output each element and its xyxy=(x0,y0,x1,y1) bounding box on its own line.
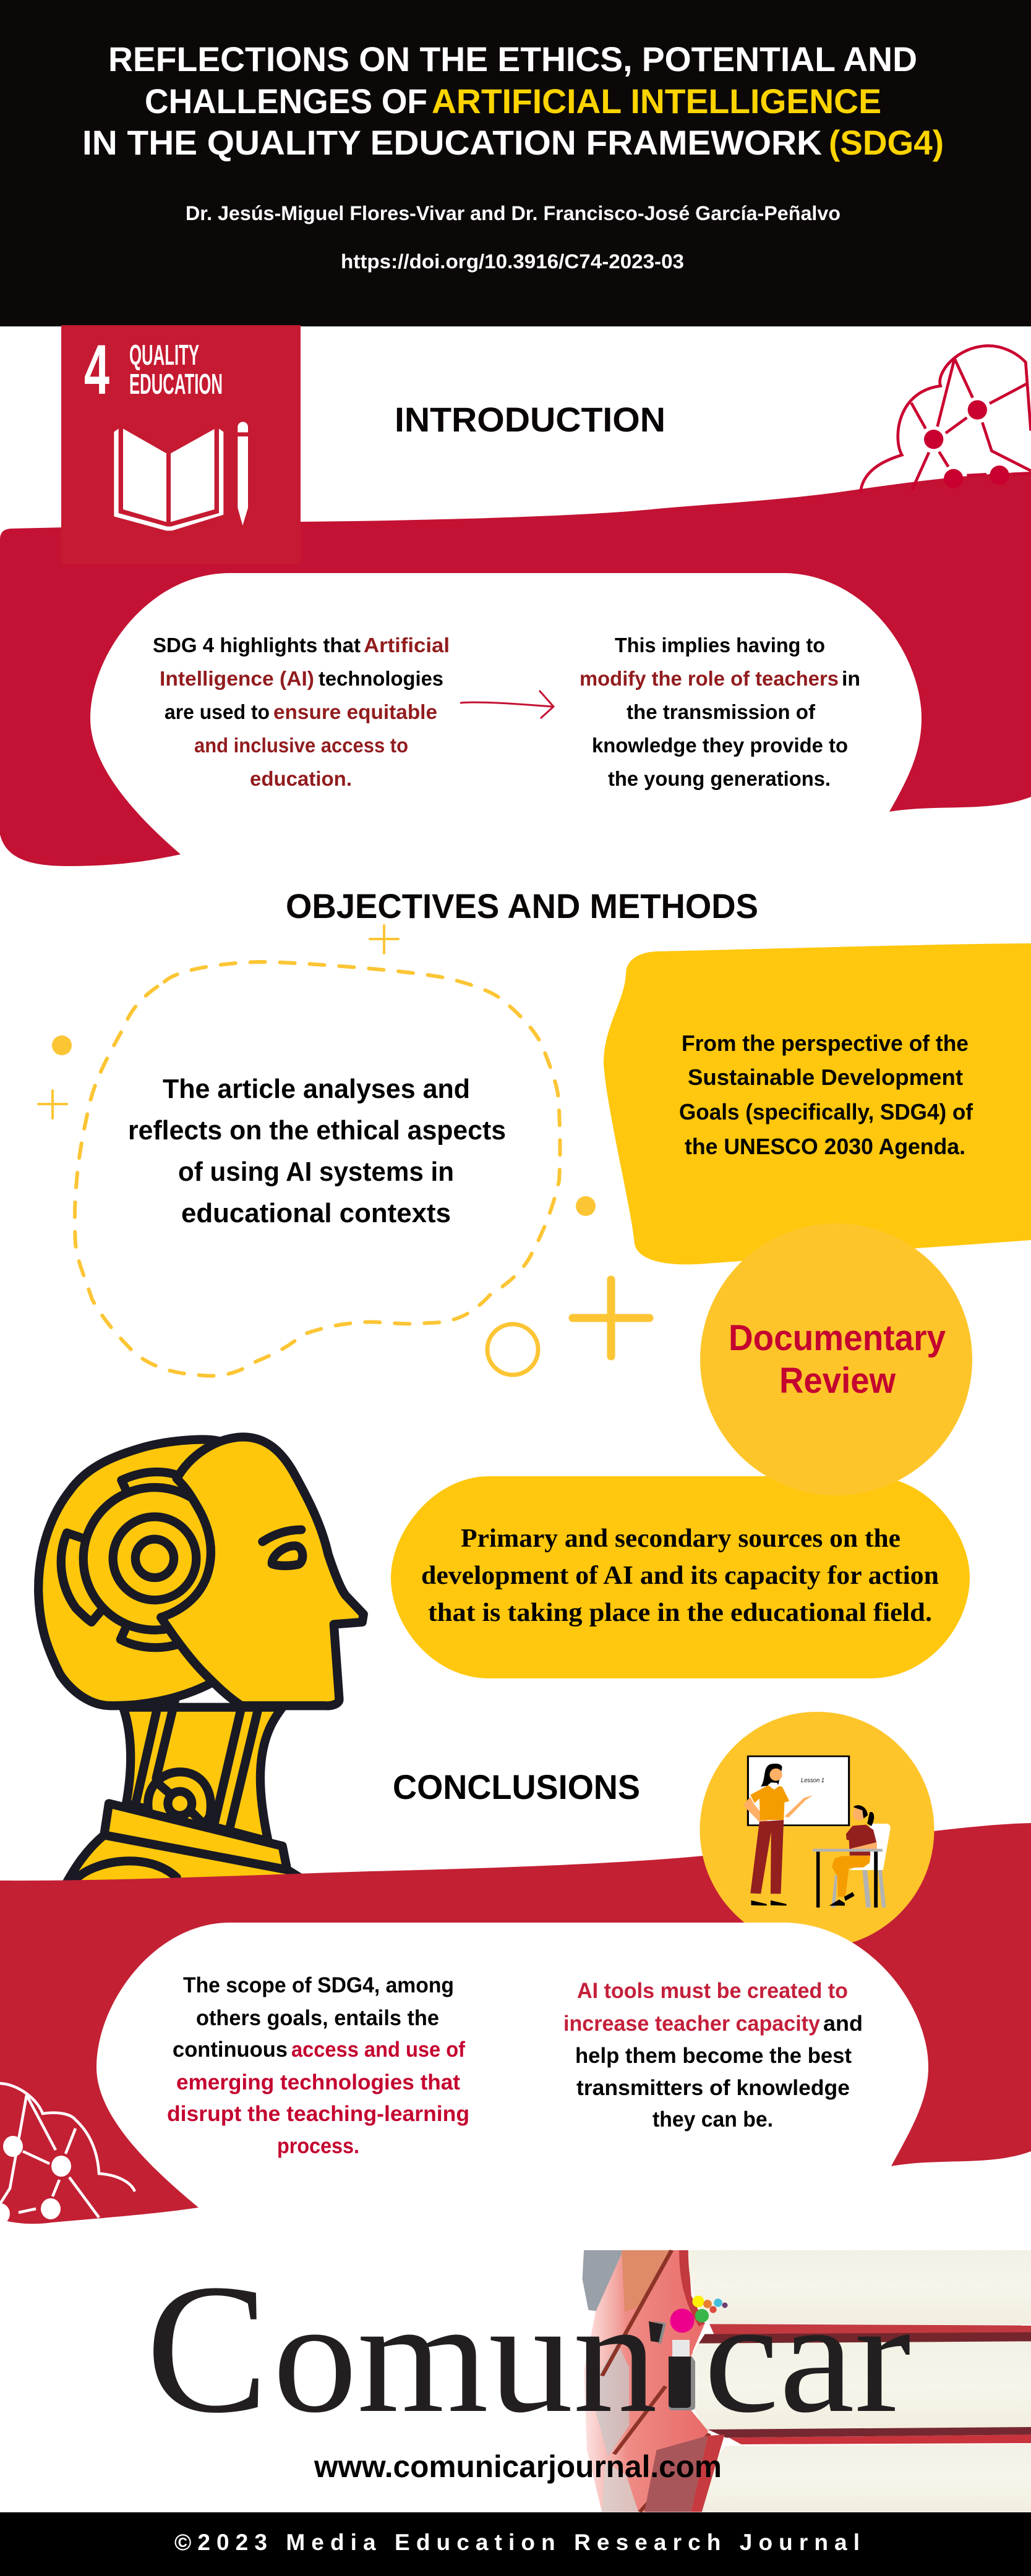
heading: conclusions: CONCLUSIONS xyxy=(393,1767,640,1806)
text: AI tools must be created: AI tools must be created to xyxy=(577,1979,848,2003)
text: scope of SDG4: access and use of xyxy=(291,2038,465,2062)
text: AI tools must be created xyxy=(563,1979,863,2132)
text: modify the role of teachers xyxy=(580,634,860,790)
icon: SDG 4 quality education tile xyxy=(61,325,301,564)
title: CHALLENGES OF xyxy=(145,82,427,121)
text: perspective xyxy=(679,1031,973,1159)
panel: footer: ©2023 Media Education Research Journal xyxy=(174,2530,860,2555)
text: scope of SDG4: process. xyxy=(277,2134,359,2158)
text: SDG 4 highlights: ensure equitable xyxy=(273,700,437,723)
logo: Comunicar: C xyxy=(146,2246,268,2451)
panel: introduction band xyxy=(0,472,1031,866)
icon: SDG 4 quality education tile: 4 xyxy=(84,331,109,409)
logo: Comunicar: car xyxy=(704,2267,911,2446)
panel: documentary review circle: Documentary xyxy=(729,1318,946,1358)
panel: primary and secondary sources pill xyxy=(391,1476,970,1678)
arrow xyxy=(460,691,554,718)
heading: objectives and methods: OBJECTIVES AND METHODS xyxy=(286,886,758,925)
panel: conclusions white card xyxy=(96,1923,928,2238)
text: SDG 4 highlights: are used to xyxy=(165,700,270,723)
icon: USB stick as letter i xyxy=(649,2321,695,2410)
text: AI tools must be created: increase teacher capacity xyxy=(563,2012,821,2036)
title xyxy=(82,40,944,162)
title: IN THE QUALITY EDUCATION FRAMEWORK xyxy=(82,123,822,162)
text: scope of SDG4: continuous xyxy=(173,2038,288,2062)
icon: network cloud bottom left xyxy=(0,2083,135,2224)
icon: robot head in profile xyxy=(38,1437,364,1902)
text: article aim: reflects on the ethical aspects xyxy=(128,1115,506,1146)
text: perspective: From the perspective of the xyxy=(682,1031,969,1056)
heading: introduction: INTRODUCTION xyxy=(395,400,665,439)
text: article aim: The article analyses and xyxy=(163,1074,470,1104)
text: AI tools must be created: help them become the best xyxy=(575,2044,852,2068)
text: scope of SDG4: The scope of SDG4, among xyxy=(183,1973,454,1997)
text: scope of SDG4: disrupt the teaching-learning xyxy=(167,2102,469,2126)
text: SDG 4 highlights: SDG 4 highlights that xyxy=(153,634,361,657)
icon: network cloud top right xyxy=(861,346,1031,493)
text: modify the role of teachers: the transmission of xyxy=(627,700,816,723)
panel: title header xyxy=(0,0,1031,326)
text: SDG 4 highlights: technologies xyxy=(319,667,443,690)
panel: footer xyxy=(0,2512,1031,2576)
text: AI tools must be created: they can be. xyxy=(652,2107,773,2132)
icon: coloured dots xyxy=(670,2296,727,2333)
icon: teacher xyxy=(743,1764,813,1906)
icon: student and desk xyxy=(813,1805,883,1908)
text: scope of SDG4: emerging technologies that xyxy=(176,2070,460,2094)
icon: book and pencil xyxy=(114,422,248,530)
icon: teacher and student circle xyxy=(700,1712,934,1948)
doi: https://doi.org/10.3916/C74-2023-03 xyxy=(341,250,684,273)
text: scope of SDG4: others goals, entails the xyxy=(196,2006,439,2030)
text: modify the role of teachers: knowledge they provide to xyxy=(592,734,848,757)
panel: conclusions band xyxy=(0,1823,1031,2224)
panel: documentary review circle xyxy=(700,1223,972,1495)
panel: documentary review circle: Review xyxy=(779,1361,896,1401)
icon: SDG 4 quality education tile: EDUCATION xyxy=(129,368,223,400)
decorative plus and dots xyxy=(38,925,649,1375)
panel: introduction white card xyxy=(90,573,922,878)
text: AI tools must be created: and xyxy=(823,2012,863,2036)
text: sources: that is taking place in the educational field. xyxy=(428,1599,932,1627)
logo: Comunicar: omun xyxy=(273,2267,657,2446)
title: ARTIFICIAL INTELLIGENCE xyxy=(432,82,881,121)
text: sources: Primary and secondary sources on the xyxy=(461,1524,901,1553)
text: SDG 4 highlights: and inclusive access to xyxy=(194,734,408,757)
text: modify the role of teachers: in xyxy=(842,667,860,690)
text: SDG 4 highlights: Artificial xyxy=(364,634,450,657)
panel: yellow perspective blob xyxy=(604,943,1031,1264)
authors: Dr. Jesús-Miguel Flores-Vivar and Dr. Francisco-José García-Peñalvo xyxy=(186,202,841,224)
text: modify the role of teachers: the young generations. xyxy=(608,767,831,790)
panel: dashed blob with article aim xyxy=(75,962,560,1376)
text: modify the role of teachers: modify the role of teachers xyxy=(580,667,839,690)
text: sources: development of AI and its capacity for action xyxy=(421,1562,939,1590)
text: article aim: educational contexts xyxy=(181,1198,451,1228)
image: stacked red books xyxy=(583,2250,1031,2512)
text: modify the role of teachers: This implies having to xyxy=(615,634,825,657)
text: scope of SDG4 xyxy=(167,1973,469,2158)
title: (SDG4) xyxy=(829,123,944,162)
text: sources xyxy=(421,1524,939,1627)
text: SDG 4 highlights: education. xyxy=(250,767,352,790)
logo: Comunicar xyxy=(146,2246,911,2451)
text: SDG 4 highlights: Intelligence (AI) xyxy=(160,667,314,690)
text: perspective: the UNESCO 2030 Agenda. xyxy=(685,1134,965,1159)
title: REFLECTIONS ON THE ETHICS, POTENTIAL AND xyxy=(108,40,917,79)
text: article aim xyxy=(128,1074,506,1228)
icon: chair xyxy=(831,1870,886,1908)
text: perspective: Sustainable Development xyxy=(688,1065,963,1090)
icon: SDG 4 quality education tile: QUALITY xyxy=(129,339,199,371)
text: website: www.comunicarjournal.com xyxy=(314,2449,722,2484)
text: article aim: of using AI systems in xyxy=(178,1157,454,1187)
text: AI tools must be created: transmitters of knowledge xyxy=(576,2076,850,2100)
text: perspective: Goals (specifically, SDG4) of xyxy=(679,1099,973,1124)
text: SDG 4 highlights xyxy=(153,634,450,790)
text: lesson on board: Lesson 1 xyxy=(801,1777,824,1784)
icon: whiteboard xyxy=(748,1756,849,1826)
